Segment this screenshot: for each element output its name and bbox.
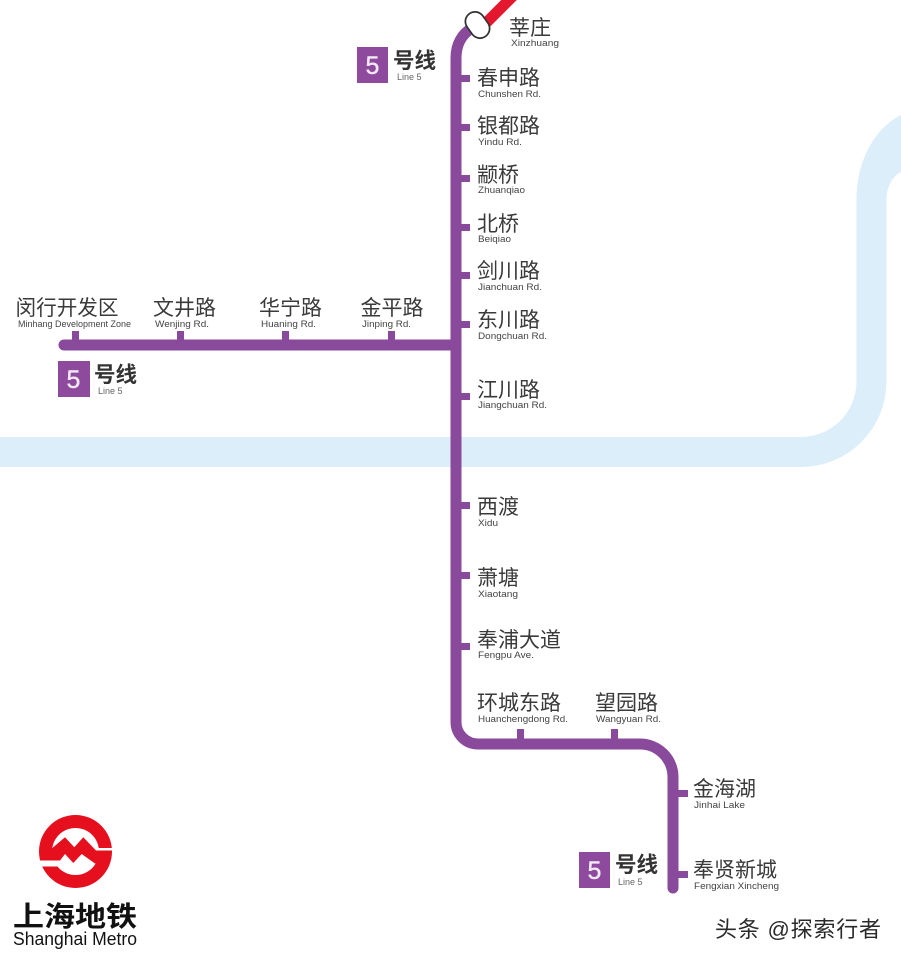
station label: Zhuanqiao: 颛桥 xyxy=(477,164,519,187)
station ticks xyxy=(72,75,688,878)
station label: Zhuanqiao: Zhuanqiao xyxy=(478,185,525,195)
station label: Beiqiao: 北桥 xyxy=(477,213,519,236)
station label: Chunshen Rd.: 春申路 xyxy=(477,67,540,90)
station label: Jinhai Lake: Jinhai Lake xyxy=(694,800,745,810)
line 5 main route xyxy=(64,28,673,888)
red line 1 segment xyxy=(479,0,515,30)
station label: Xiaotang: Xiaotang xyxy=(478,589,518,599)
line badge: south: 5 xyxy=(588,857,601,885)
line badge: top: Line 5 xyxy=(397,72,422,82)
line badge: west branch: 号线 xyxy=(94,363,137,387)
station label: Xidu: 西渡 xyxy=(477,496,519,519)
station label: Jinping Rd.: 金平路 xyxy=(360,297,424,320)
station label: Fengxian Xincheng: Fengxian Xincheng xyxy=(694,881,779,891)
station label: Jiangchuan Rd.: Jiangchuan Rd. xyxy=(478,400,547,410)
station label: Fengxian Xincheng: 奉贤新城 xyxy=(693,859,777,882)
station label: Jinhai Lake: 金海湖 xyxy=(693,778,756,801)
station label: Wenjing Rd.: 文井路 xyxy=(153,297,216,320)
station label: Fengpu Ave.: 奉浦大道 xyxy=(477,629,561,652)
station label: Jianchuan Rd.: 剑川路 xyxy=(477,260,540,283)
station label: Dongchuan Rd. xyxy=(477,309,547,341)
station label: Jiangchuan Rd.: 江川路 xyxy=(477,379,540,402)
line badge: top: 5 xyxy=(366,52,379,80)
station label: Beiqiao: Beiqiao xyxy=(478,234,511,244)
station label: Huaning Rd.: 华宁路 xyxy=(259,297,322,320)
line badge: top xyxy=(357,47,436,83)
station label: Jianchuan Rd.: Jianchuan Rd. xyxy=(478,282,542,292)
station label: Wangyuan Rd.: Wangyuan Rd. xyxy=(596,714,661,724)
line badge: south: Line 5 xyxy=(618,877,643,887)
station label: Xinzhuang xyxy=(509,17,559,48)
line badge: top: 号线 xyxy=(393,49,436,73)
station label: Huanchengdong Rd.: 环城东路 xyxy=(477,692,561,715)
station label: Minhang Development Zone xyxy=(16,297,131,329)
station label: Jiangchuan Rd. xyxy=(477,379,547,410)
station label: Jianchuan Rd. xyxy=(477,260,542,292)
station label: Fengpu Ave.: Fengpu Ave. xyxy=(478,650,534,660)
station label: Dongchuan Rd.: 东川路 xyxy=(477,309,540,332)
station label: Wangyuan Rd.: 望园路 xyxy=(595,692,658,715)
logo mark xyxy=(35,815,114,888)
station label: Huanchengdong Rd. xyxy=(477,692,568,724)
logo Chinese name: 上海地铁 xyxy=(13,901,137,932)
station label: Yindu Rd.: 银都路 xyxy=(477,115,540,138)
line badge: south xyxy=(579,852,658,888)
station label: Minhang Development Zone: 闵行开发区 xyxy=(16,297,118,320)
line badge: west branch: Line 5 xyxy=(98,386,123,396)
station label: Yindu Rd.: Yindu Rd. xyxy=(478,137,522,147)
line badge: west branch: 5 xyxy=(67,366,80,394)
station label: Zhuanqiao xyxy=(477,164,525,195)
watermark: 头条 @探索行者 xyxy=(715,917,881,942)
station label: Xidu: Xidu xyxy=(478,518,498,528)
river xyxy=(0,115,901,467)
line badge: south: 号线 xyxy=(615,853,658,877)
station label: Xinzhuang: Xinzhuang xyxy=(511,38,559,48)
station label: Xiaotang: 萧塘 xyxy=(477,567,519,590)
station label: Xinzhuang: 莘庄 xyxy=(509,17,551,40)
station label: Minhang Development Zone: Minhang Development Zone xyxy=(18,319,131,329)
station label: Wenjing Rd.: Wenjing Rd. xyxy=(155,319,209,329)
station label: Dongchuan Rd.: Dongchuan Rd. xyxy=(478,331,547,341)
station label: Chunshen Rd.: Chunshen Rd. xyxy=(478,89,541,99)
station label: Wangyuan Rd. xyxy=(595,692,661,724)
station label: Huanchengdong Rd.: Huanchengdong Rd. xyxy=(478,714,568,724)
station label: Huaning Rd.: Huaning Rd. xyxy=(261,319,316,329)
station label: Jinping Rd.: Jinping Rd. xyxy=(362,319,411,329)
line badge: west branch xyxy=(58,361,137,397)
logo English name: Shanghai Metro xyxy=(13,929,137,949)
interchange station: Xinzhuang xyxy=(475,22,480,28)
logo: Shanghai Metro xyxy=(13,815,137,949)
